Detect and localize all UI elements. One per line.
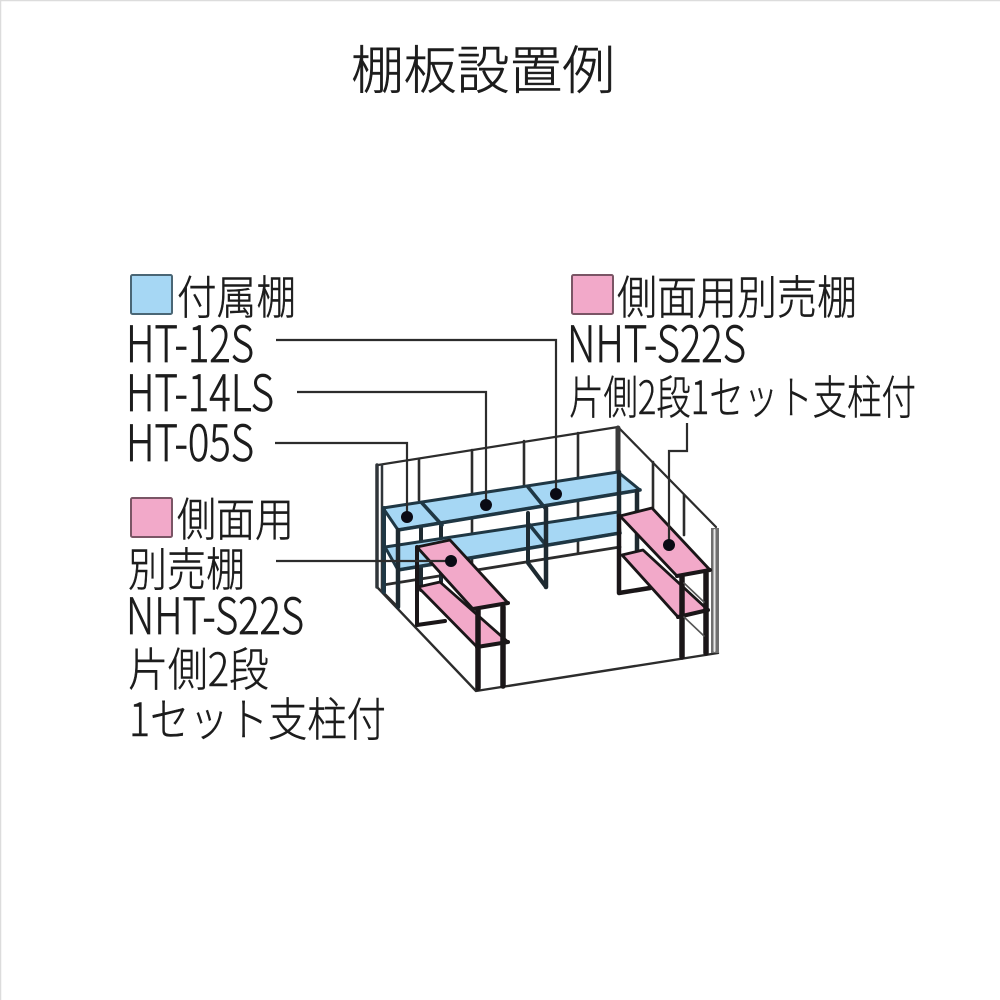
shed outline: walls and floor xyxy=(377,427,719,691)
model: HT-14LS: HT-14LS xyxy=(126,354,274,426)
pink right lower shelf xyxy=(622,550,708,617)
legend: side shelf left xyxy=(126,484,386,750)
model: HT-12S: HT-12S xyxy=(126,305,254,377)
blue lower shelf xyxy=(385,512,620,570)
leader: HT-12S xyxy=(276,340,556,494)
legend: included shelves xyxy=(126,262,296,476)
swatch: blue xyxy=(131,275,172,314)
pink left lower shelf xyxy=(418,582,508,647)
model: NHT-S22S left: NHT-S22S xyxy=(126,577,304,649)
leader lines xyxy=(275,340,687,561)
pink left shelf unit xyxy=(417,540,508,688)
note: one side two tiers: 片側2段 xyxy=(128,634,269,700)
label: side shelf sold separately: 側面用別売棚 xyxy=(617,262,857,328)
leader: left side shelf xyxy=(276,560,451,562)
pink right shelf unit xyxy=(619,508,710,657)
shed shelf diagram xyxy=(275,340,719,691)
swatch: pink right xyxy=(572,275,613,314)
leader: HT-14LS xyxy=(297,392,486,505)
pink left upper shelf xyxy=(417,540,508,609)
swatch: pink left xyxy=(131,498,172,537)
callout dots xyxy=(401,488,675,567)
title: 棚板設置例 xyxy=(351,29,615,104)
model: HT-05S: HT-05S xyxy=(126,404,254,476)
legend: side shelf right xyxy=(567,262,916,428)
note: one set with posts: 1セット支柱付 xyxy=(129,684,386,750)
model: NHT-S22S right: NHT-S22S xyxy=(567,305,746,377)
label: included shelves: 付属棚 xyxy=(177,262,296,328)
pink right upper shelf xyxy=(620,508,710,576)
blue shelves and frame xyxy=(383,472,640,607)
label: side: 側面用 xyxy=(177,484,294,550)
blue upper shelf xyxy=(383,472,640,530)
leader: right side shelf xyxy=(669,423,687,545)
leader: HT-05S xyxy=(275,443,407,517)
label: sold separately: 別売棚 xyxy=(128,534,245,600)
